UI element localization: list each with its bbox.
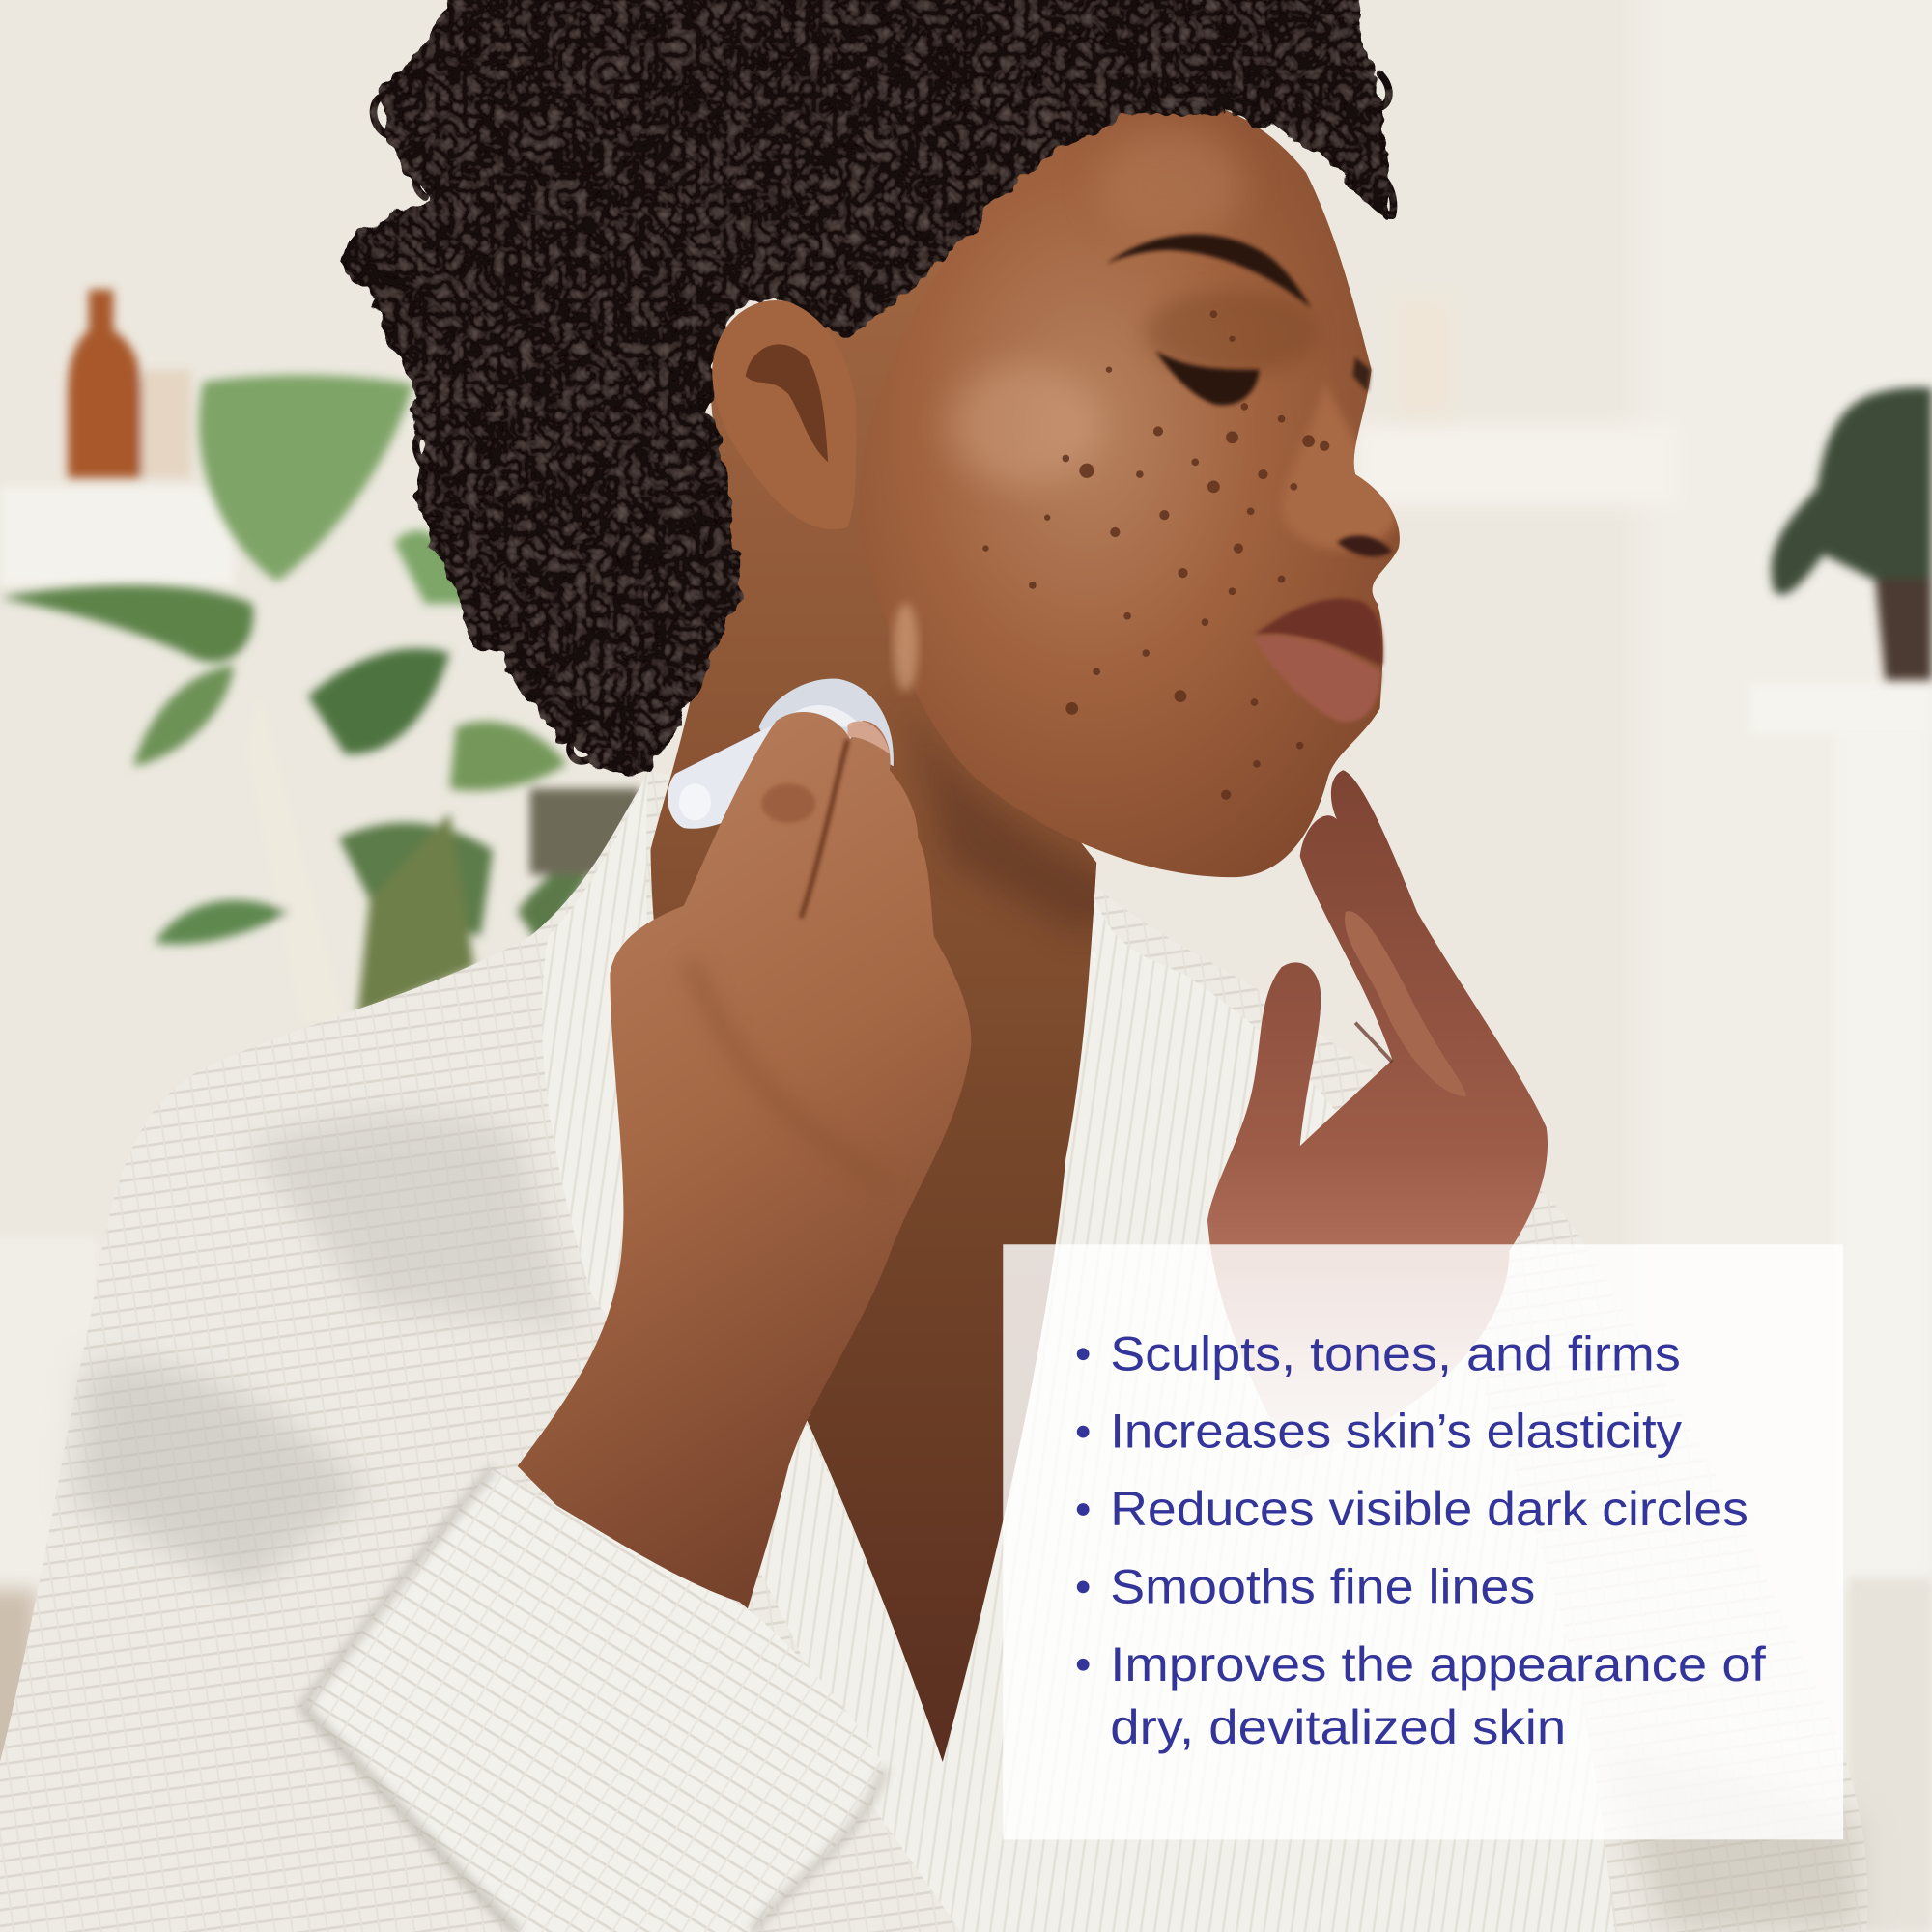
facial shading, clipped to the face xyxy=(949,129,1398,550)
closed eye xyxy=(1155,352,1260,405)
robe: body xyxy=(0,770,1867,1932)
forehead highlight xyxy=(1107,132,1239,232)
benefit text: dry, devitalized skin xyxy=(1110,1700,1566,1754)
tendon shadow on back of the hand xyxy=(690,961,887,1182)
hand at the chin xyxy=(1208,770,1548,1459)
benefit text xyxy=(1110,1326,1766,1754)
jaw shadow on neck xyxy=(912,730,1096,937)
hand holding the device, and forearm xyxy=(518,712,971,1676)
cuff shadow edges xyxy=(301,1468,493,1707)
jaw glint xyxy=(894,603,918,692)
robe: grey shaded folds xyxy=(74,1111,1861,1932)
neck and chest skin xyxy=(651,200,1097,1762)
eyebrow xyxy=(1106,235,1311,308)
benefit text: Improves the appearance of xyxy=(1110,1637,1766,1691)
benefit text: Increases skin’s elasticity xyxy=(1110,1405,1682,1459)
benefit text: Reduces visible dark circles xyxy=(1110,1482,1748,1536)
nostril xyxy=(1337,535,1392,556)
robe: left collar xyxy=(542,770,1010,1932)
cheek highlight xyxy=(949,363,1096,487)
dark potted plant, right xyxy=(1772,387,1932,680)
nose xyxy=(1282,382,1398,550)
hair: loose curls on the edge xyxy=(350,74,1394,761)
blurred green plant, left xyxy=(0,375,640,1023)
amber bottle on shelf xyxy=(68,290,191,478)
eye socket shade xyxy=(1146,290,1319,376)
freckles xyxy=(982,310,1329,800)
knuckle xyxy=(761,783,815,823)
hair: curly dark afro xyxy=(345,0,1394,774)
benefit text: Smooths fine lines xyxy=(1110,1559,1535,1613)
ear xyxy=(712,300,856,529)
benefit text: Sculpts, tones, and firms xyxy=(1110,1326,1681,1380)
robe: right lapel xyxy=(943,887,1614,1932)
callout panel: benefits list xyxy=(1003,1244,1843,1839)
silicone face cup device xyxy=(668,679,894,829)
fingernail xyxy=(848,722,890,754)
sleeve cuff xyxy=(0,1468,885,1932)
finger separation xyxy=(801,739,848,918)
face xyxy=(859,100,1400,877)
lips xyxy=(1254,599,1383,666)
bullet markers xyxy=(1077,1348,1090,1671)
